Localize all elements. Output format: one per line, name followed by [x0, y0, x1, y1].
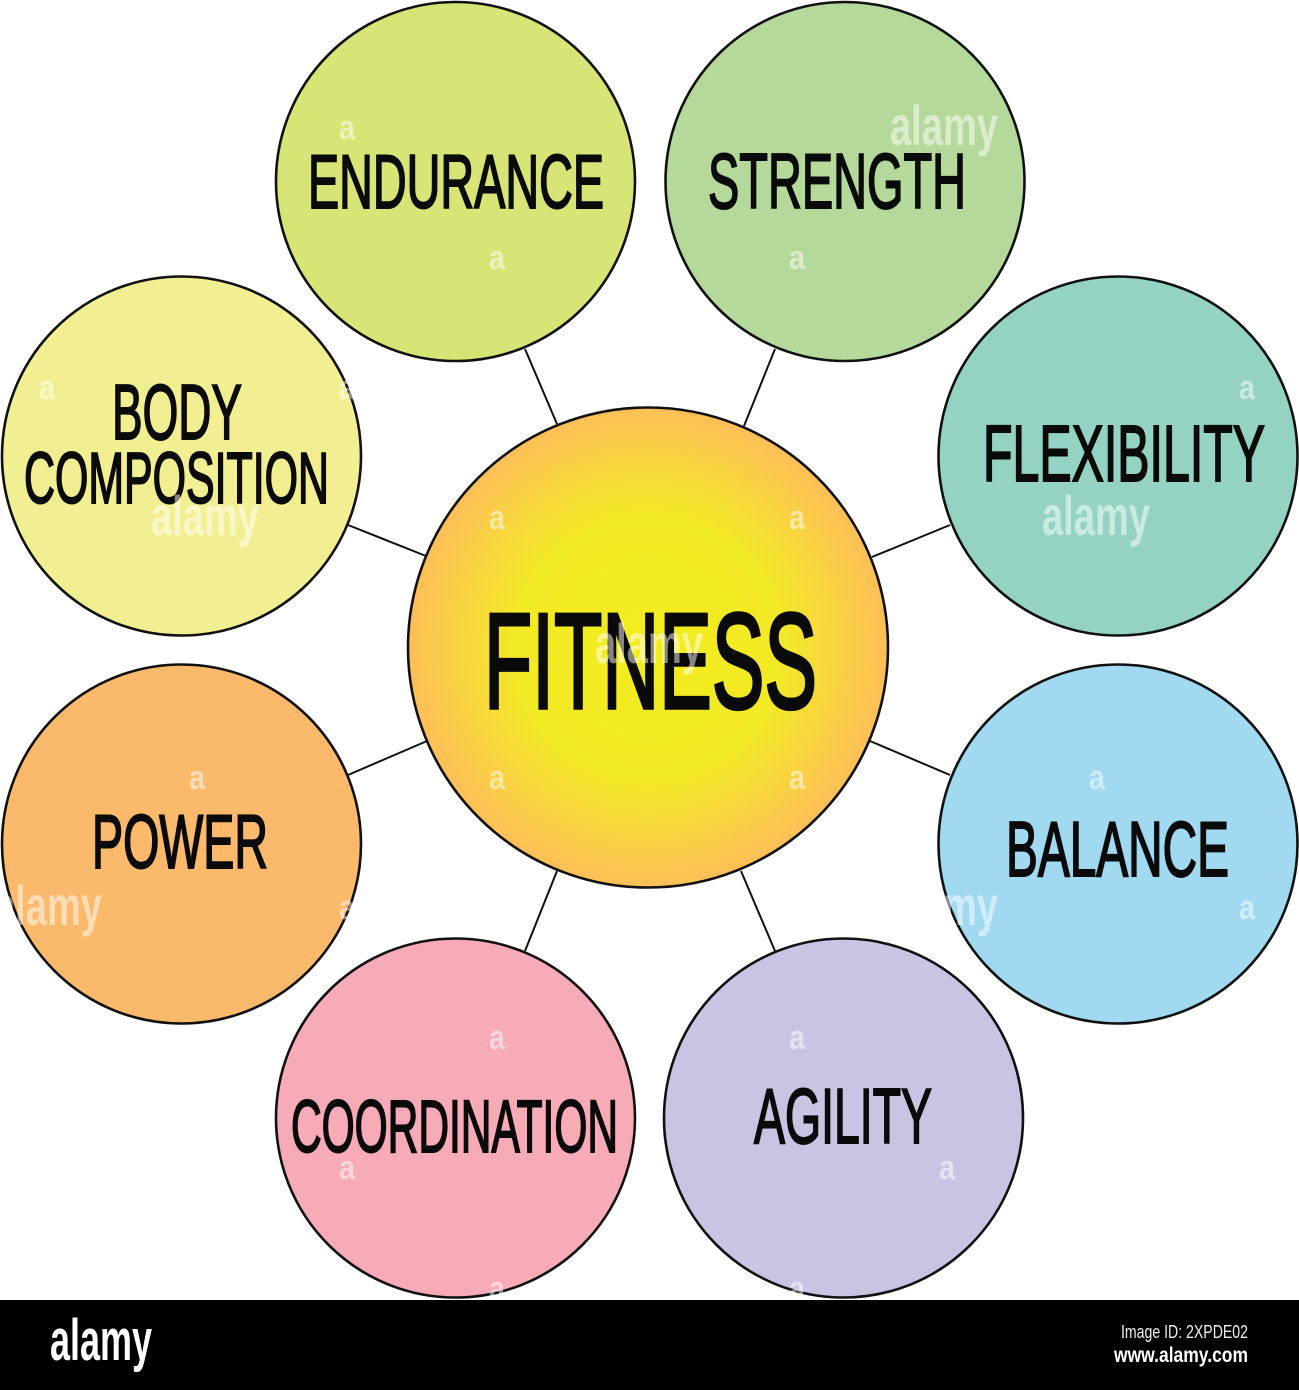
- watermarks: alamy: [890, 874, 998, 937]
- watermarks: a: [939, 1149, 956, 1187]
- footer bar: [0, 1300, 1299, 1390]
- watermarks: alamy: [151, 484, 259, 547]
- node: power: POWER: [92, 800, 268, 885]
- watermarks: a: [1089, 759, 1106, 797]
- node: endurance: [276, 2, 635, 361]
- watermarks: a: [489, 1019, 506, 1057]
- watermarks: a: [1239, 369, 1256, 407]
- watermarks: a: [789, 239, 806, 277]
- watermarks: a: [189, 759, 206, 797]
- watermarks: a: [339, 889, 356, 927]
- node: agility: AGILITY: [754, 1072, 932, 1160]
- node: power: [2, 664, 361, 1024]
- node: coordination: [276, 938, 635, 1298]
- node: balance: [938, 664, 1298, 1024]
- website: www.alamy.com: [1113, 1344, 1248, 1367]
- footer logo: alamy: [50, 1308, 152, 1373]
- node: endurance: ENDURANCE: [308, 140, 604, 225]
- central node: fitness: FITNESS: [484, 585, 817, 737]
- node: body composition: COMPOSITION: [24, 439, 329, 519]
- node: strength: STRENGTH: [708, 137, 966, 225]
- watermarks: a: [789, 1270, 806, 1308]
- watermarks: a: [489, 499, 506, 537]
- watermarks: alamy: [595, 612, 703, 675]
- node: body composition: BODY: [112, 368, 242, 456]
- watermarks: a: [789, 1019, 806, 1057]
- watermarks: a: [1239, 889, 1256, 927]
- image id: Image ID: 2XPDE02: [1121, 1322, 1248, 1342]
- watermarks: a: [489, 239, 506, 277]
- node: agility: [664, 938, 1023, 1298]
- watermarks: alamy: [1042, 484, 1150, 547]
- node: coordination: COORDINATION: [291, 1085, 618, 1168]
- watermarks: a: [339, 369, 356, 407]
- node: body composition: [2, 276, 361, 636]
- watermarks: a: [339, 1149, 356, 1187]
- node: flexibility: [938, 276, 1298, 636]
- watermarks: a: [39, 369, 56, 407]
- watermarks: alamy: [890, 94, 998, 157]
- watermarks: a: [339, 109, 356, 147]
- central node: fitness: [408, 408, 888, 888]
- watermarks: a: [789, 759, 806, 797]
- watermarks: a: [489, 759, 506, 797]
- node: strength: [666, 2, 1024, 361]
- connector lines: [348, 349, 950, 951]
- watermarks: a: [489, 1270, 506, 1308]
- watermarks: a: [789, 499, 806, 537]
